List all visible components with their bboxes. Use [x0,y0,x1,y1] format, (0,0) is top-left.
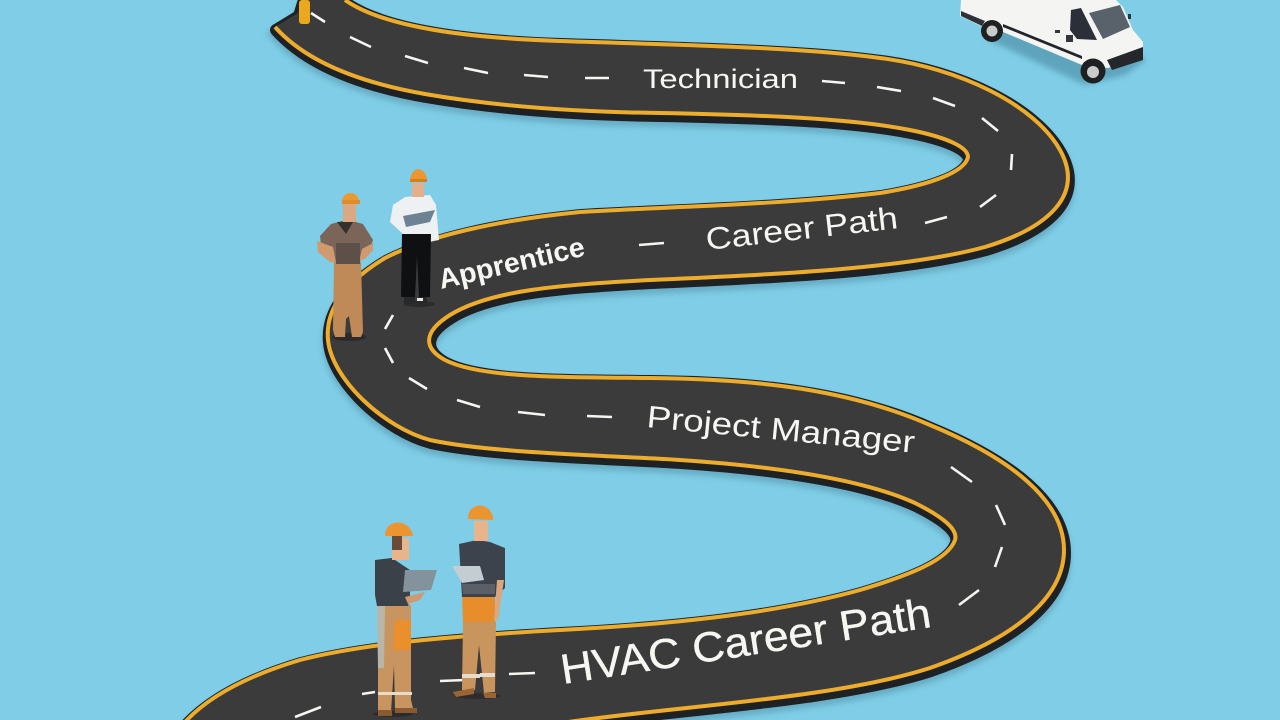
white centre dashes [295,13,1012,717]
road label: HVAC Career Path: HVAC Career Path [557,589,934,693]
road label: Project Manager: Project Manager [645,399,916,460]
road label: Technician: Technician [643,64,798,94]
road label: Apprentice: Apprentice [435,231,588,295]
worker: laptop, left [373,522,437,717]
worker: tablet, right [452,506,505,699]
worker: brown shirt [317,193,373,341]
worker: white shirt with clipboard [390,169,439,307]
delivery van [960,0,1146,85]
road label: Career Path: Career Path [704,200,900,257]
yellow road edge lines [185,0,1068,720]
winding road [185,0,1069,720]
yellow post [299,0,310,24]
